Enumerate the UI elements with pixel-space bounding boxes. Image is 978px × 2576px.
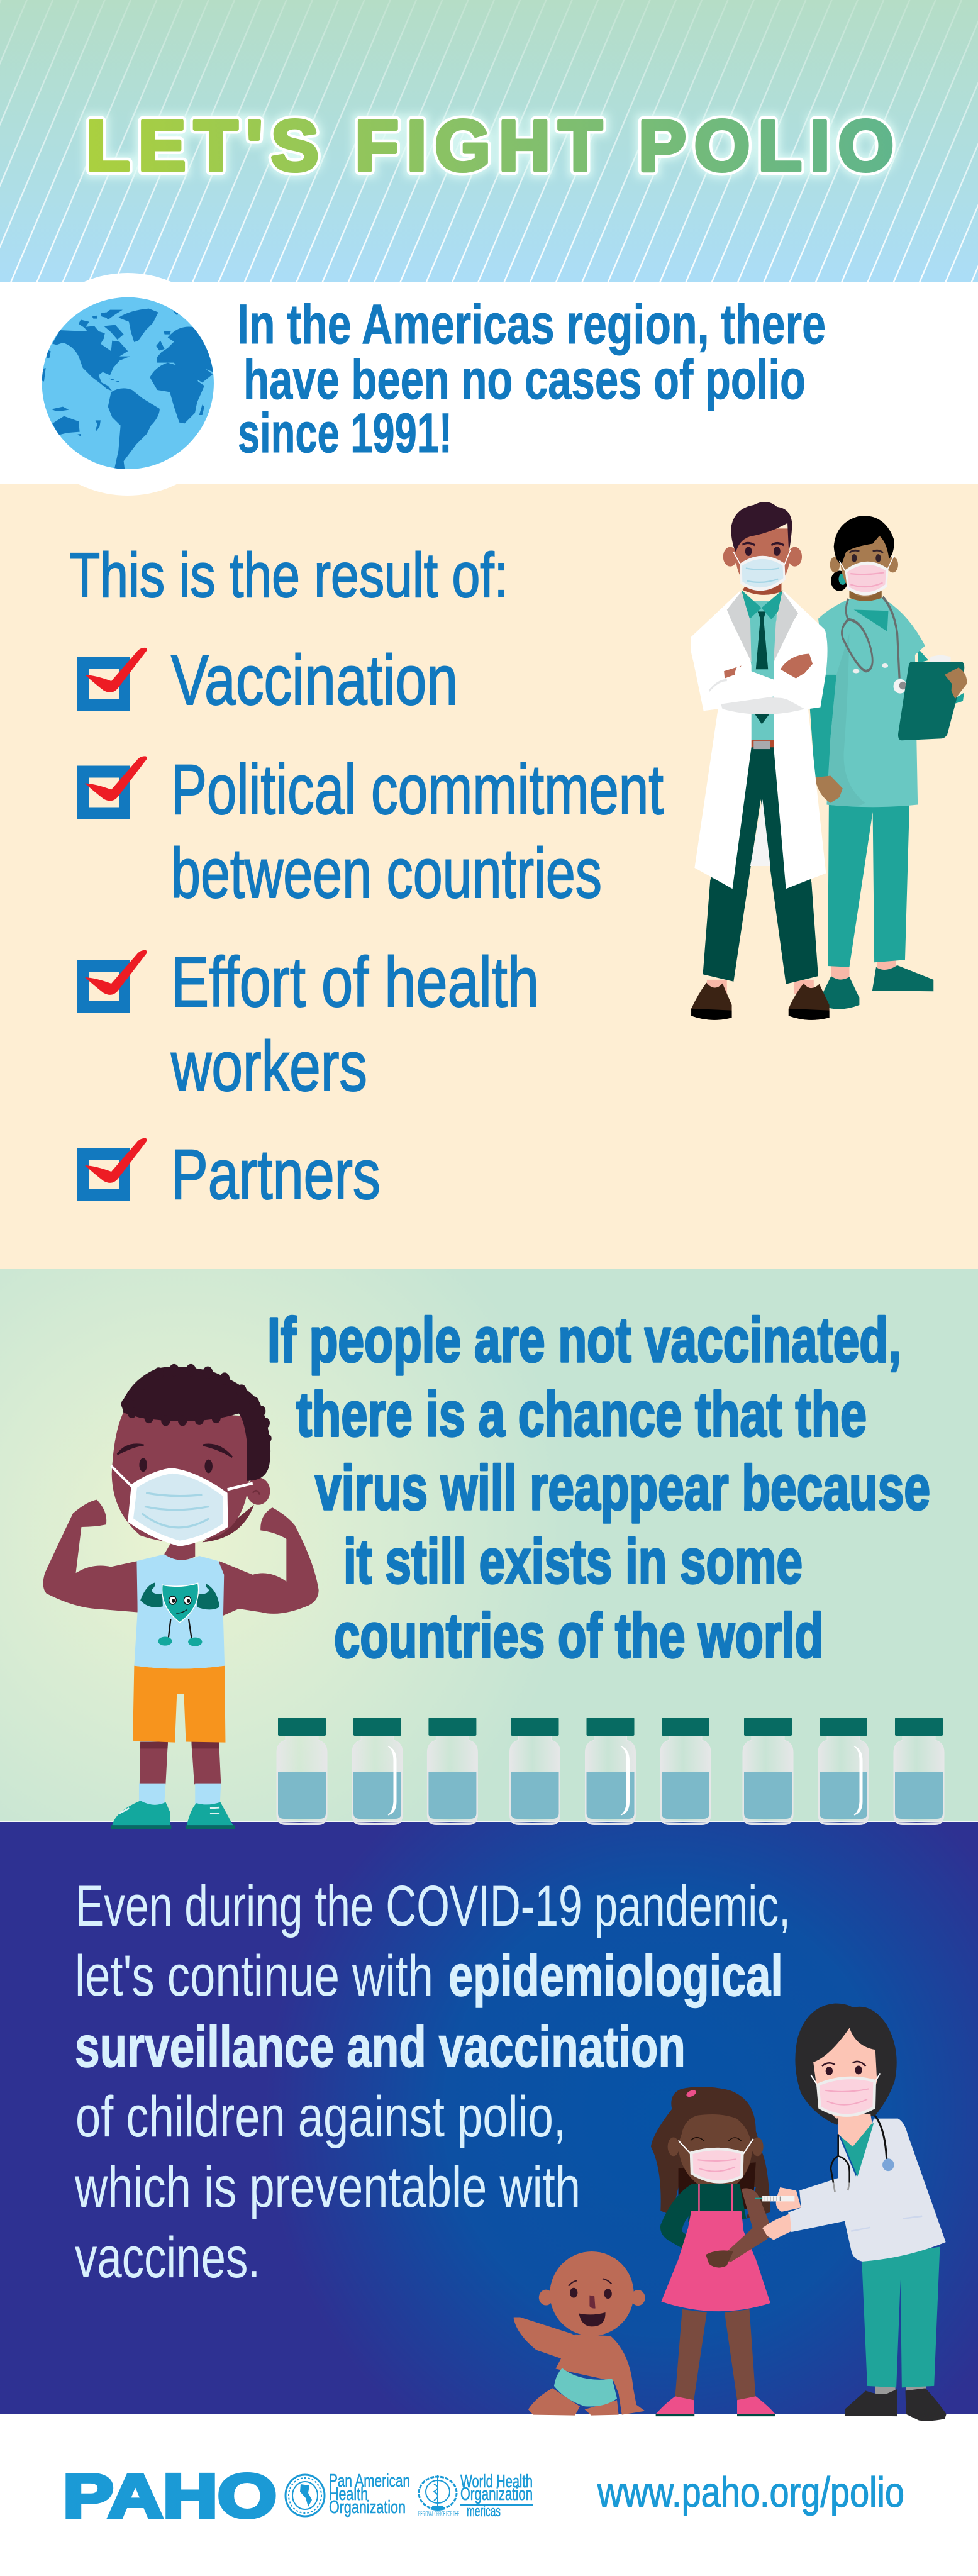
icon: globe [42,297,216,470]
message text: of children against polio, [75,2085,566,2149]
shield mascot [140,1582,219,1646]
message text: which is preventable with [74,2155,581,2219]
globe backdrop circle [16,273,239,496]
title: LET'S FIGHT POLIO [86,106,894,186]
message text: surveillance and vaccination [75,2015,686,2079]
statement text: since 1991! [238,401,452,464]
boy head [111,1364,272,1560]
boy shirt [134,1554,225,1668]
statement text [237,292,826,464]
boy legs [111,1741,235,1829]
logo: PAHO: Organization [329,2497,406,2518]
logo: PAHO: Pan American [329,2471,410,2491]
logo: PAHO [63,2462,533,2530]
logo: PAHO: mericas [467,2503,501,2520]
statement text: have been no cases of polio [243,348,806,411]
checklist item: vaccination: Vaccination [171,641,458,719]
logo: PAHO: Organization [460,2484,533,2504]
checklist item: political commitment [77,750,664,913]
white divider [0,1821,978,1822]
message text [74,1874,791,2290]
vaccine vials [277,1718,944,1825]
warning text: countries of the world [334,1601,823,1671]
message text: epidemiological [448,1944,783,2008]
checklist item: partners [77,1135,381,1214]
warning text: it still exists in some [343,1526,803,1597]
nurse [810,516,967,1009]
results heading: This is the result of: [69,540,508,611]
checklist item: health workers [77,943,539,1106]
logo: PAHO: REGIONAL OFFICE FOR THE [418,2509,459,2518]
message text: vaccines. [75,2226,260,2290]
doctor [691,502,830,1020]
logo: PAHO: PAHO [63,2462,277,2530]
checklist item: political commitment: between countries [171,834,602,913]
illustration: vaccination scene [514,2004,947,2421]
message text: let's continue with [75,1944,433,2008]
checklist item: partners: Partners [171,1135,381,1214]
baby [514,2251,645,2416]
panel: title header [0,0,978,282]
panel: footer [0,2414,978,2576]
title: LET'S FIGHT POLIO [86,106,894,186]
website url: www.paho.org/polio [597,2468,904,2516]
panel: Americas statement [42,273,825,496]
nurse administering vaccine [755,2004,947,2421]
illustration: health workers [691,502,967,1020]
icon: PAHO seal [286,2475,325,2516]
panel: results list [0,484,978,1269]
logo: PAHO: Health [329,2484,368,2504]
checklist item: political commitment: Political commitment [171,750,664,829]
panel: vaccination warning [0,1269,978,1829]
illustration: boy with shield shirt [43,1364,319,1829]
icon: WHO emblem [419,2475,457,2511]
logo: PAHO: World Health [460,2472,533,2492]
checklist item: health workers: Effort of health [171,943,539,1021]
checklist item: vaccination [77,641,458,719]
title: LET'S FIGHT POLIO [86,106,894,186]
panel: COVID-19 surveillance message [0,1822,978,2421]
girl [651,2087,775,2416]
warning text [267,1305,930,1671]
checklist item: health workers: workers [170,1027,367,1106]
boy shorts [133,1666,225,1743]
boy right arm [219,1507,319,1616]
boy arms [43,1500,138,1612]
